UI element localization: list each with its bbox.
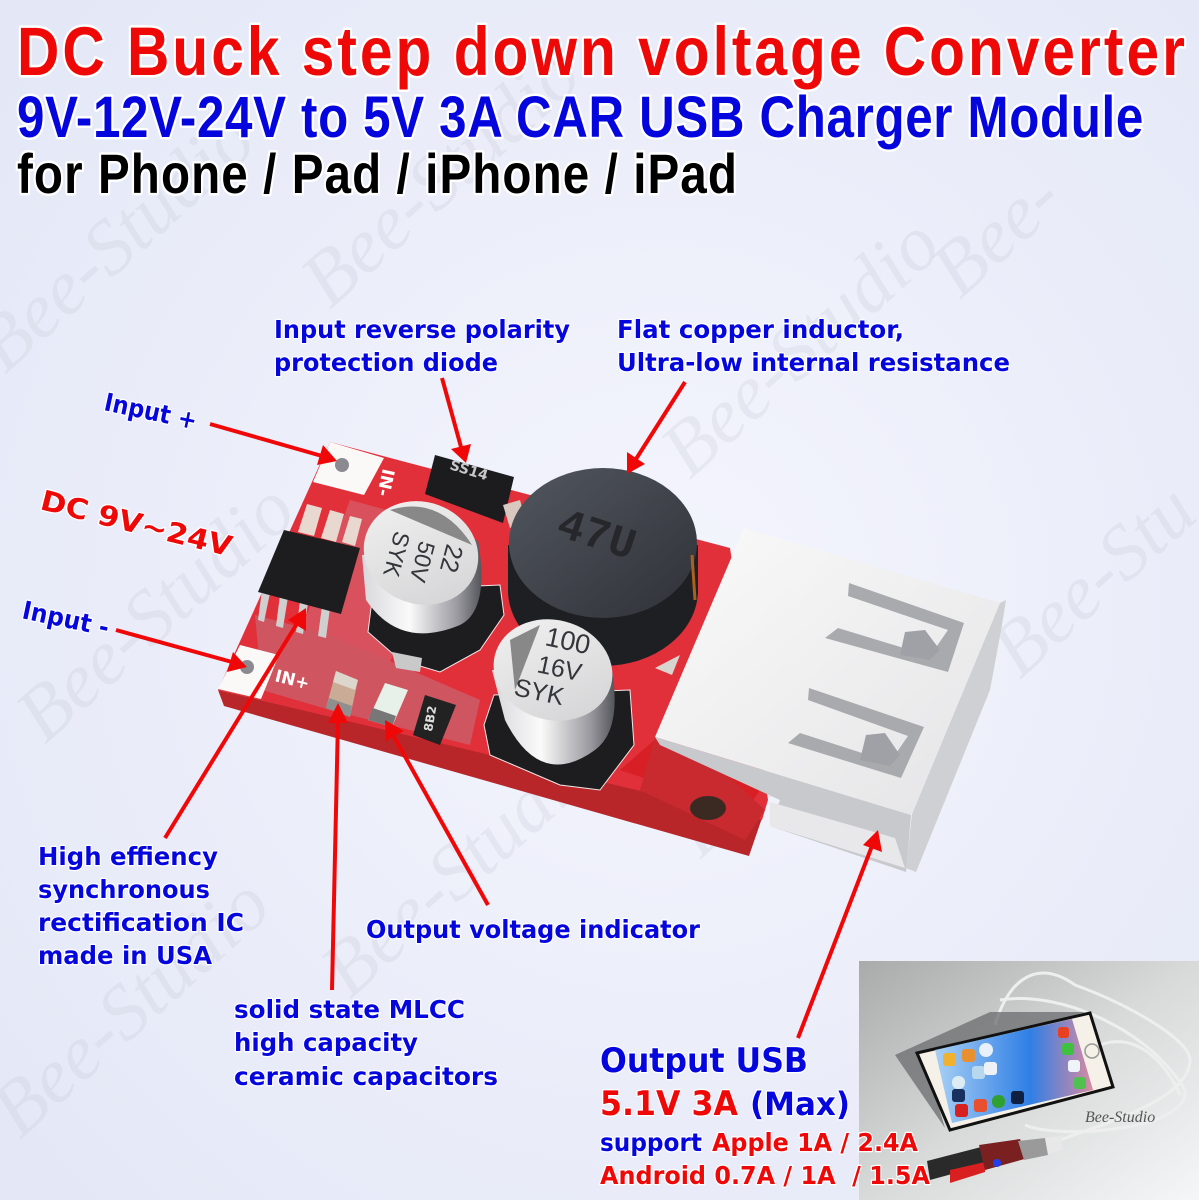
capacitor 22uF: 22: [434, 541, 468, 576]
watermark pattern: Bee-Studio: [303, 719, 616, 1013]
arrow: diode: [442, 378, 471, 463]
usb connector top: [655, 528, 1000, 815]
label: output USB: 5.1V 3A: [600, 1084, 739, 1124]
label: rectification IC: rectification IC: [38, 908, 244, 937]
arrow: input plus: [210, 424, 337, 465]
photo watermark: Bee-Studio: [1085, 1109, 1155, 1126]
label: output USB: support: [600, 1128, 702, 1157]
label: output USB: [600, 1041, 931, 1190]
resistor 8B2: 8B2: [421, 705, 439, 733]
arrow: input minus: [116, 630, 247, 672]
capacitor 22uF base: [368, 585, 504, 672]
label: rectification IC: made in USA: [38, 941, 213, 970]
SS14 diode: SS14: [448, 458, 490, 484]
phone home button: [1085, 1044, 1099, 1058]
SS14 diode: [425, 455, 526, 528]
title: [17, 13, 1185, 206]
capacitor 100uF: [482, 606, 624, 765]
watermark pattern: Bee-Studio: [283, 29, 596, 323]
ic bottom pins: [258, 590, 270, 622]
silkscreen IN-: IN-: [372, 467, 398, 498]
label: copper inductor: [617, 315, 1010, 377]
capacitor 22uF: 50V: [404, 539, 440, 586]
arrow: output USB: [798, 830, 882, 1038]
pcb edge: [218, 690, 762, 856]
label: output USB: Output USB: [600, 1041, 808, 1081]
arrow: inductor: [627, 382, 685, 474]
label: output USB: Apple 1A / 2.4A: [712, 1128, 919, 1157]
resistor 8B2: [413, 695, 456, 745]
converter module board: [218, 442, 1006, 872]
phone body: [917, 1013, 1113, 1130]
watermark pattern: Bee-Studio: [653, 579, 966, 873]
usb connector side: [655, 737, 911, 872]
label: input voltage: DC 9V~24V: [37, 484, 236, 563]
label: input plus: Input +: [102, 388, 200, 435]
output indicator LED: [368, 683, 408, 727]
capacitor 100uF: 16V: [535, 650, 584, 687]
capacitor 22uF: [349, 485, 493, 633]
label: MLCC: ceramic capacitors: [234, 1062, 498, 1091]
capacitor 100uF: SYK: [512, 673, 567, 711]
phone shadow: [895, 1012, 1085, 1128]
label: rectification IC: High effiency: [38, 842, 218, 871]
heading line 3: for Phone / Pad / iPhone / iPad: [17, 143, 737, 206]
input minus pad: [218, 645, 279, 699]
watermark pattern: Bee-: [913, 152, 1078, 313]
app icons: [943, 1027, 1086, 1117]
arrow: output indicator: [385, 720, 488, 905]
label: reverse polarity diode: [274, 315, 570, 377]
inductor: [508, 468, 698, 675]
label: MLCC: [234, 995, 498, 1091]
usb slot lower: [788, 688, 924, 778]
silkscreen IN+: IN+: [273, 666, 311, 694]
capacitor 100uF base: [484, 690, 634, 790]
label: rectification IC: [38, 842, 244, 970]
capacitor 100uF: 100: [543, 622, 593, 660]
synchronous rectification IC: [258, 530, 360, 614]
watermark pattern: Bee-Studio: [0, 464, 311, 758]
pcb top: [218, 442, 768, 820]
label: MLCC: solid state MLCC: [234, 995, 465, 1024]
label: reverse polarity diode: Input reverse polarity: [274, 315, 570, 344]
inductor: 47U: [551, 501, 641, 573]
charging cable: [995, 973, 1190, 1140]
phone screen: [935, 1019, 1093, 1123]
arrow: MLCC: [328, 703, 348, 990]
silver pad under capacitor 22uF: [392, 652, 422, 672]
inset photo: phone charging: [859, 961, 1199, 1200]
label: MLCC: high capacity: [234, 1028, 418, 1057]
usb underside and mount: [640, 737, 765, 840]
usb slot upper: [825, 583, 964, 672]
label: copper inductor: Flat copper inductor,: [617, 315, 904, 344]
watermark pattern: Bee-Studio: [643, 199, 956, 493]
capacitor 22uF: SYK: [378, 529, 415, 581]
heading line 1: DC Buck step down voltage Converter: [17, 13, 1185, 90]
label: input minus: Input -: [20, 596, 112, 642]
label: rectification IC: synchronous: [38, 875, 210, 904]
heading line 2: 9V-12V-24V to 5V 3A CAR USB Charger Module: [17, 85, 1143, 150]
label: output USB: Android 0.7A / 1A / 1.5A: [600, 1161, 931, 1190]
input plus pad: [313, 442, 384, 495]
label: output USB: (Max): [750, 1085, 850, 1123]
arrow: rectification IC: [165, 608, 306, 838]
ic top pins: [298, 504, 322, 536]
label: output voltage indicator: Output voltage indicator: [366, 915, 701, 944]
label: copper inductor: Ultra-low internal resistance: [617, 348, 1010, 377]
miniature module: [927, 1136, 1062, 1183]
MLCC capacitor: [326, 671, 358, 717]
label: reverse polarity diode: protection diode: [274, 348, 498, 377]
